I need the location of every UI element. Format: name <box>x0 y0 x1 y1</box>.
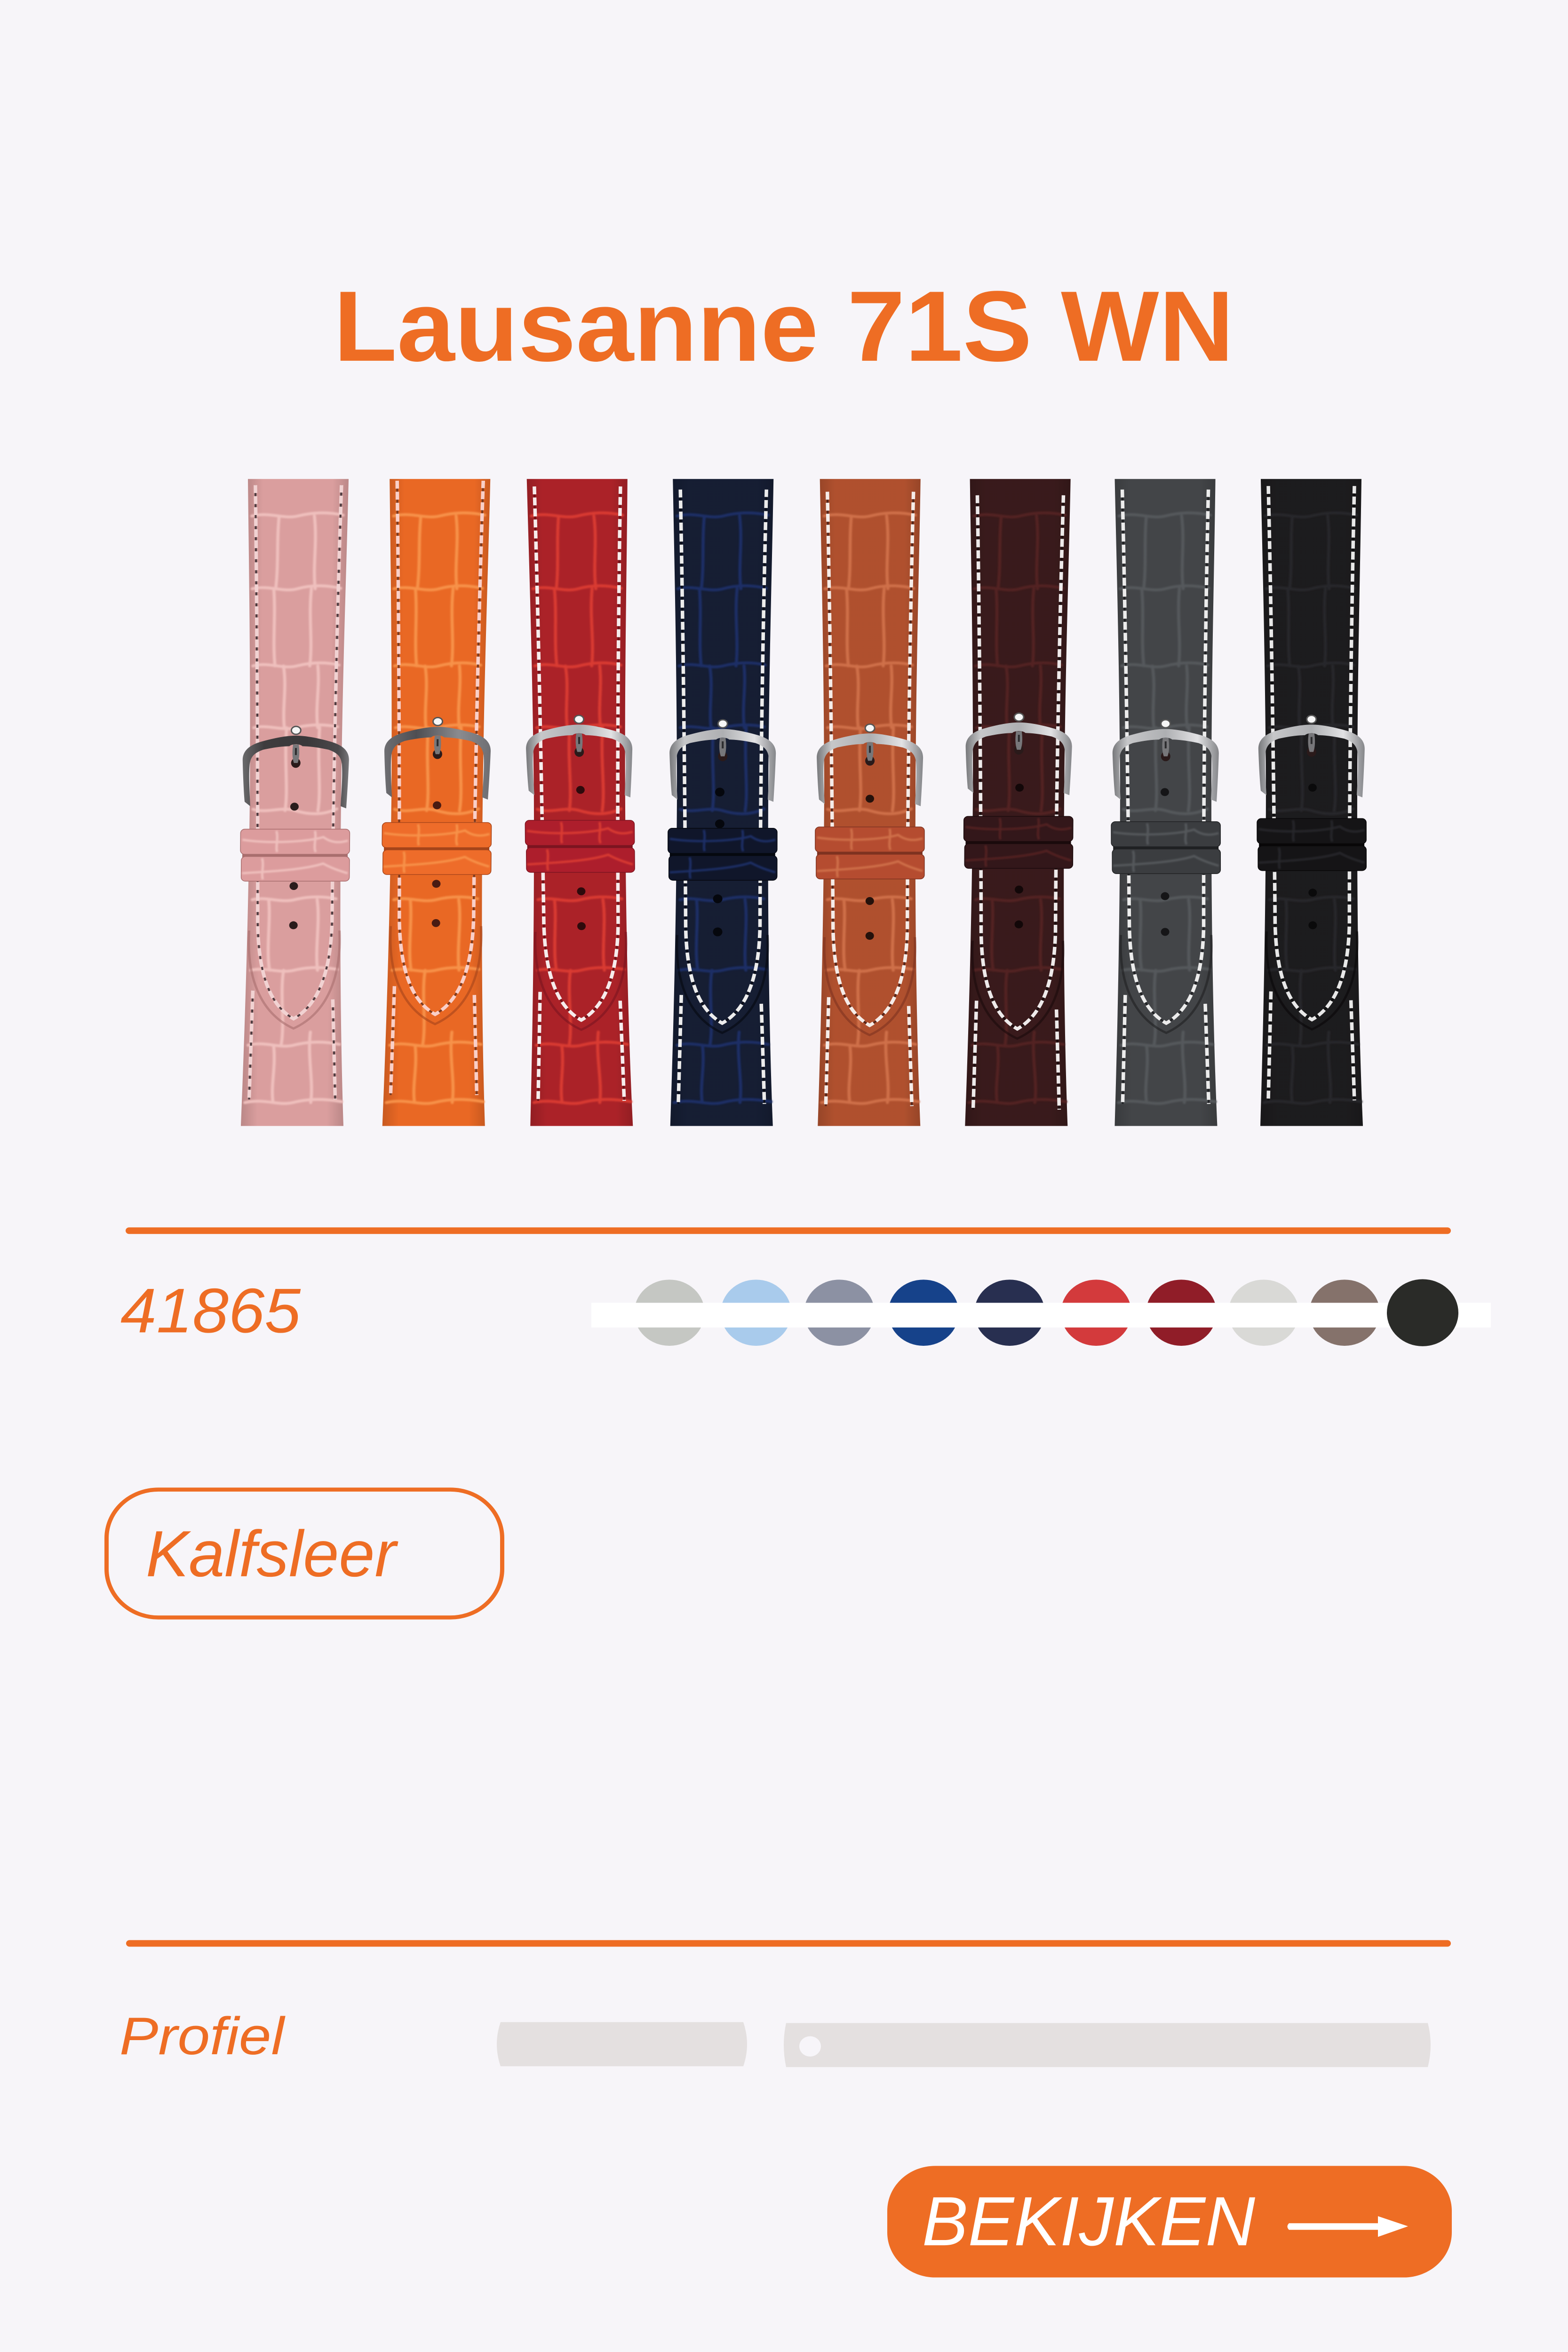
strap: red <box>523 479 637 1126</box>
profile label: Profiel <box>119 2007 286 2066</box>
title: Lausanne 71S WN <box>334 270 1234 382</box>
strap: dark brown <box>962 479 1075 1126</box>
button: BEKIJKEN <box>887 2166 1452 2278</box>
colour swatches <box>591 1279 1491 1346</box>
button: BEKIJKEN: BEKIJKEN <box>922 2183 1255 2260</box>
material tag: Kalfsleer: Kalfsleer <box>146 1518 398 1590</box>
strap: orange <box>380 479 494 1126</box>
strap image row <box>238 479 1367 1126</box>
article number: 41865 <box>120 1276 301 1346</box>
divider rule top <box>126 1227 1451 1234</box>
strap: pink <box>238 479 353 1126</box>
material tag: Kalfsleer <box>106 1490 502 1617</box>
strap: navy <box>668 479 778 1126</box>
profile shape: long bar with hole <box>784 2023 1431 2067</box>
strap: tan <box>815 479 925 1126</box>
icon: arrow <box>1287 2216 1408 2237</box>
divider rule bottom <box>126 1940 1451 1947</box>
strap: grey <box>1111 479 1221 1126</box>
strap: black <box>1257 479 1367 1126</box>
profile shape: short bar <box>497 2022 747 2066</box>
